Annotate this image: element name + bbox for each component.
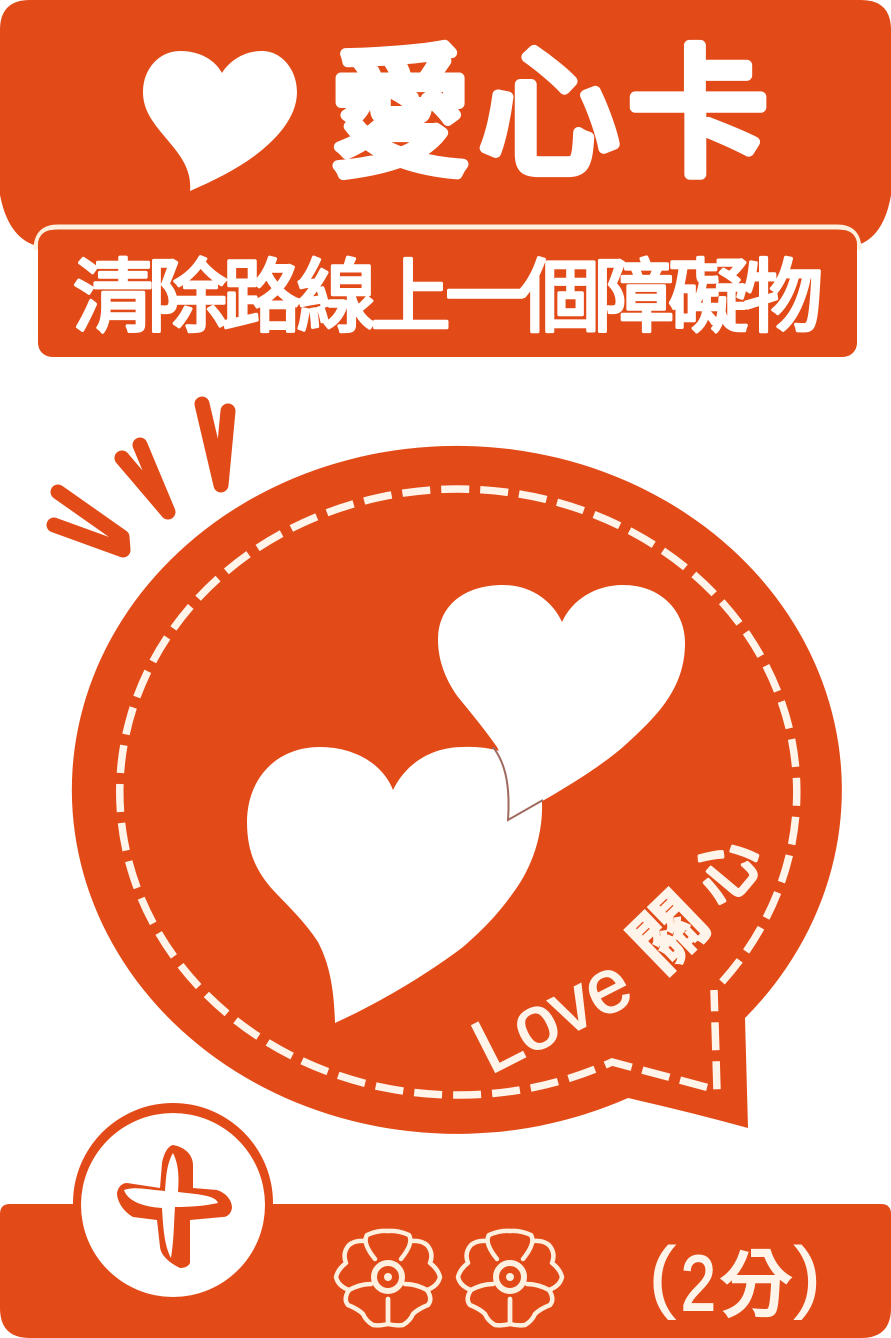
score text: [649, 1231, 821, 1327]
subtitle text: 清除路線上一個障礙物: [73, 253, 823, 342]
icon: emphasis ticks: [54, 404, 228, 550]
score text: 分: [720, 1246, 792, 1326]
title: 愛心卡: [330, 36, 768, 193]
score text: ): [794, 1231, 821, 1320]
speech bubble: [72, 446, 842, 1134]
plus badge: [73, 1103, 273, 1303]
label: 關: 關: [617, 880, 724, 987]
icon: small heart: [438, 585, 685, 820]
icon: large heart: [247, 747, 542, 1023]
subtitle box: [36, 227, 859, 357]
score: flower two: [458, 1231, 562, 1325]
dashed stitching: [120, 489, 797, 1095]
icon: plus sign: [117, 1145, 232, 1268]
label: 心: 心: [677, 821, 777, 919]
score text: 2: [681, 1239, 716, 1327]
footer banner: [0, 1204, 891, 1338]
icon: title heart: [143, 51, 297, 191]
label: Love: Love: [459, 940, 645, 1090]
score: flower one: [336, 1231, 440, 1325]
score text: (: [649, 1231, 676, 1320]
header banner: [0, 0, 891, 245]
